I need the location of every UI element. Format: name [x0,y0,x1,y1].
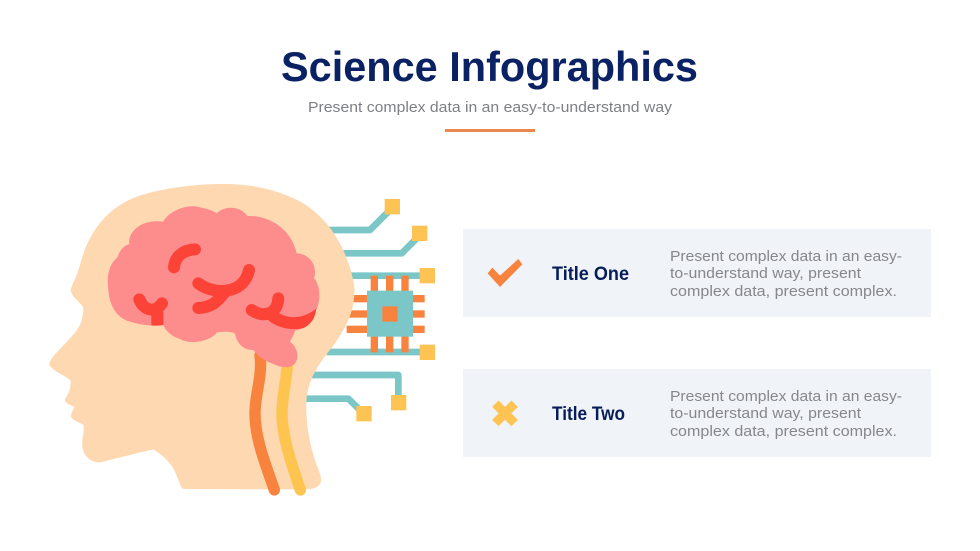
panel: title one [463,229,931,317]
spinal nerve: orange [255,355,274,490]
illustration: head with brain and circuit [49,184,435,490]
heading: title two: Title Two [552,404,625,425]
title underline [445,129,535,132]
circuit end nodes [356,199,435,421]
panel: title two [463,369,931,457]
brain folds [139,249,320,333]
title: Science Infographics [281,43,698,90]
head silhouette [49,184,354,489]
text block: title two description [670,389,902,440]
text block: title two description: complex data, present complex. [670,424,897,440]
icon: check mark [488,259,522,287]
brain [108,206,320,367]
text block: title one description: to-understand way, present [670,266,861,282]
icon: cross mark [495,404,515,423]
circuit traces [303,208,427,413]
text block: title one description: complex data, present complex. [670,284,897,300]
heading: title one: Title One [552,264,629,285]
text block: title two description: to-understand way, present [670,406,861,422]
spinal nerve: yellow [282,365,300,490]
text block: title one description [670,249,902,300]
text block: title two description: Present complex data in an easy- [670,389,902,405]
text block: title one description: Present complex data in an easy- [670,249,902,265]
microchip [347,276,425,352]
subtitle: Present complex data in an easy-to-understand way [308,99,673,116]
